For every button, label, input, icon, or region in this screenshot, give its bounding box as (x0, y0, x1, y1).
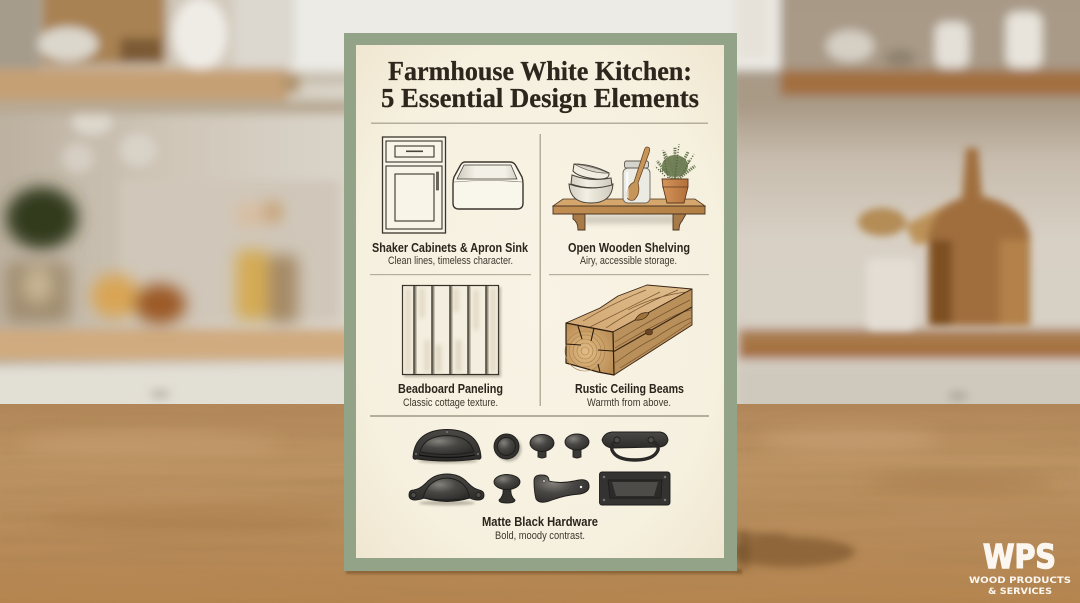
label: hardware (482, 515, 598, 542)
wooden table (0, 404, 1080, 603)
icon: stacked bowls (569, 164, 613, 203)
label: shaker: Clean lines, timeless character. (388, 255, 513, 267)
bin pull plate (600, 472, 670, 505)
panel: shaker cabinets and apron sink (372, 137, 528, 267)
label: shaker: Shaker Cabinets & Apron Sink (372, 241, 528, 255)
mushroom knob 2 (565, 434, 589, 458)
latch (534, 475, 589, 502)
panel: open wooden shelving (553, 144, 705, 267)
label: beams (575, 382, 684, 409)
label: beadboard (398, 382, 503, 409)
icon: beadboard panel (402, 286, 501, 377)
title (381, 56, 699, 113)
panel: rustic ceiling beams (565, 285, 692, 409)
mushroom knob 1 (530, 434, 554, 458)
icon: timber beam (565, 285, 692, 375)
card shadow (725, 530, 855, 570)
ring pull (602, 432, 668, 460)
label: beams: Warmth from above. (587, 397, 671, 409)
icon: wooden shelf (553, 199, 705, 230)
left counter objects (6, 187, 298, 324)
icon: apron sink (453, 162, 523, 209)
title: Farmhouse White Kitchen: (388, 56, 692, 86)
label: shelving: Open Wooden Shelving (568, 241, 690, 255)
panel: matte black hardware (409, 430, 670, 542)
panel dividers (370, 122, 709, 417)
label: hardware: Bold, moody contrast. (495, 530, 585, 542)
icon: glass jar with wooden spoon (623, 147, 650, 203)
turned knob (494, 474, 520, 503)
right counter objects (858, 148, 1030, 330)
counter and drawers (0, 329, 360, 360)
cup pull top (413, 430, 481, 464)
logo: WPS Wood Products & Services: WPS (983, 537, 1056, 576)
icon: hardware set (409, 430, 670, 506)
label: shelving: Airy, accessible storage. (580, 255, 677, 267)
label: shaker (372, 241, 528, 267)
icon: potted herb (655, 144, 695, 203)
logo: WPS Wood Products & Services (969, 537, 1071, 597)
logo: WPS Wood Products & Services: WOOD PRODUCTS (969, 576, 1071, 586)
label: shelving (568, 241, 690, 267)
label: hardware: Matte Black Hardware (482, 515, 598, 529)
poster card (344, 33, 737, 571)
round knob (494, 434, 522, 462)
logo: WPS Wood Products & Services: & SERVICES (988, 587, 1052, 597)
label: beams: Rustic Ceiling Beams (575, 382, 684, 396)
label: beadboard: Beadboard Paneling (398, 382, 503, 396)
shelves (0, 69, 288, 100)
icon: shaker cabinet (382, 137, 446, 233)
title: 5 Essential Design Elements (381, 83, 699, 113)
cup pull bottom (409, 474, 484, 506)
panel: beadboard paneling (398, 286, 503, 409)
label: beadboard: Classic cottage texture. (403, 397, 498, 409)
